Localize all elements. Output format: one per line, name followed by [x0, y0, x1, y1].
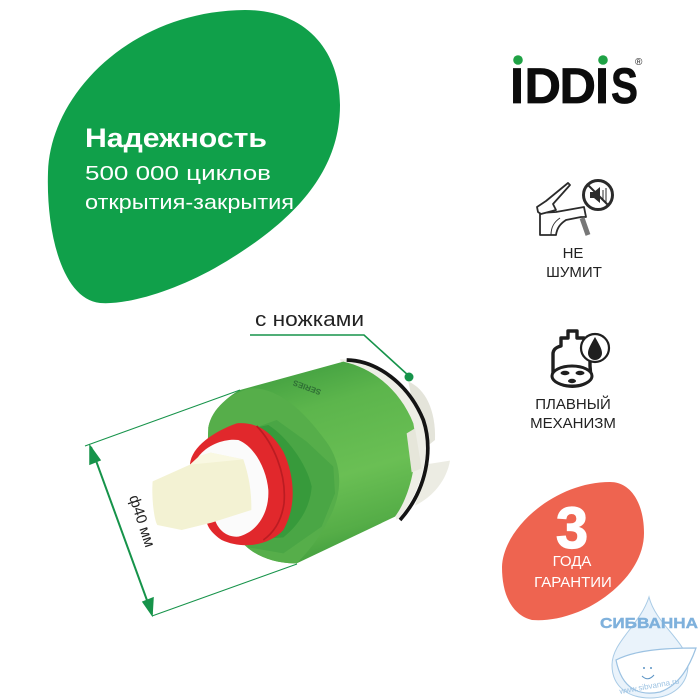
rear legs — [408, 382, 435, 447]
watermark: sibvanna — [600, 597, 698, 698]
green body — [208, 362, 415, 563]
logo: IDDIS: S — [611, 57, 638, 114]
panel: green reliability blob — [48, 10, 340, 303]
icon: quiet faucet — [537, 180, 612, 235]
dark recessed cap area — [230, 420, 335, 553]
dimension: 40 mm diameter — [85, 390, 297, 616]
label: diameter: ф40 мм — [125, 493, 158, 549]
white stem — [152, 453, 251, 530]
label: no noise: НЕ — [563, 245, 583, 262]
text: open-close: открытия-закрытия — [85, 191, 294, 214]
white band behind o-ring — [340, 359, 426, 520]
label: smooth mechanism: ПЛАВНЫЙ — [535, 395, 611, 413]
inner collar — [230, 425, 312, 540]
text: warranty: ГОДА — [553, 553, 591, 570]
label: no noise — [546, 245, 602, 281]
engraved markings: SERIES — [291, 378, 322, 397]
watermark: sibvanna: www.sibvanna.ru — [618, 677, 680, 696]
body front cap — [208, 388, 339, 563]
white inner disc — [198, 440, 268, 537]
logo: IDDIS: IDDI — [510, 57, 609, 114]
logo: IDDIS: ® — [635, 57, 643, 68]
text: cycles: 500 000 циклов — [85, 162, 271, 185]
red ring — [190, 423, 293, 545]
panel: three year warranty: ГАРАНТИИ — [534, 574, 612, 591]
product photo: cartridge — [152, 359, 450, 563]
label: smooth mechanism — [530, 395, 616, 432]
callout: with legs — [250, 309, 414, 382]
o-ring — [347, 360, 428, 520]
heading: reliability: Надежность — [85, 123, 267, 153]
number: 3: 3 — [556, 496, 588, 561]
panel: three year warranty — [502, 482, 644, 620]
label: no noise: ШУМИТ — [546, 264, 602, 281]
icon: smooth mechanism — [552, 331, 609, 386]
label: smooth mechanism: МЕХАНИЗМ — [530, 415, 616, 432]
notch — [407, 428, 422, 472]
watermark: sibvanna: СИБВАННА — [600, 615, 698, 632]
callout: with legs: с ножками — [255, 309, 364, 331]
